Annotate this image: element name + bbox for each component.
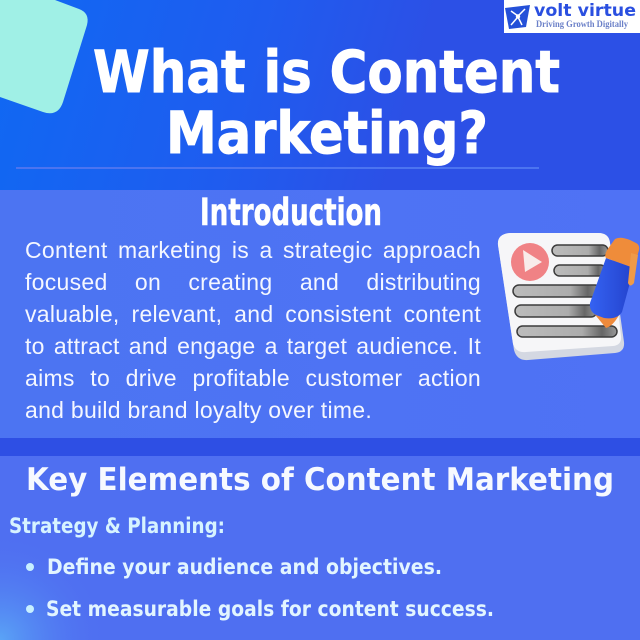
header divider: [16, 167, 539, 169]
logo icon: [505, 5, 530, 29]
logo badge: [504, 0, 640, 33]
title: [93, 38, 560, 167]
introduction paragraph: and build brand loyalty over time.: [25, 397, 372, 423]
logo tagline: Driving Growth Digitally: [536, 20, 628, 30]
pen: [590, 238, 639, 328]
title: Marketing?: [166, 99, 488, 167]
section divider band: [0, 438, 640, 456]
introduction paragraph: aims to drive profitable customer action: [25, 365, 481, 391]
logo wordmark: volt virtue: [534, 1, 636, 20]
key elements heading: Key Elements of Content Marketing: [26, 462, 614, 498]
decorative mint rounded square: [0, 0, 88, 113]
introduction paragraph: to attract and engage a target audience. It: [25, 333, 481, 359]
introduction paragraph: [25, 237, 481, 423]
subheading: strategy and planning: Strategy & Planning:: [9, 514, 225, 538]
introduction heading: Introduction: [200, 191, 382, 234]
bullet: measurable goals: Set measurable goals for content success.: [46, 597, 494, 621]
introduction paragraph: Content marketing is a strategic approach: [25, 237, 481, 263]
introduction paragraph: valuable, relevant, and consistent content: [25, 301, 481, 327]
icon: document with play button and pen: [498, 233, 639, 360]
bullet: define audience: Define your audience and objectives.: [47, 555, 442, 579]
title: What is Content: [93, 38, 560, 106]
panel: key elements background: [0, 456, 640, 640]
introduction paragraph: focused on creating and distributing: [25, 269, 481, 295]
header background: [0, 0, 640, 190]
panel: introduction background: [0, 190, 640, 438]
